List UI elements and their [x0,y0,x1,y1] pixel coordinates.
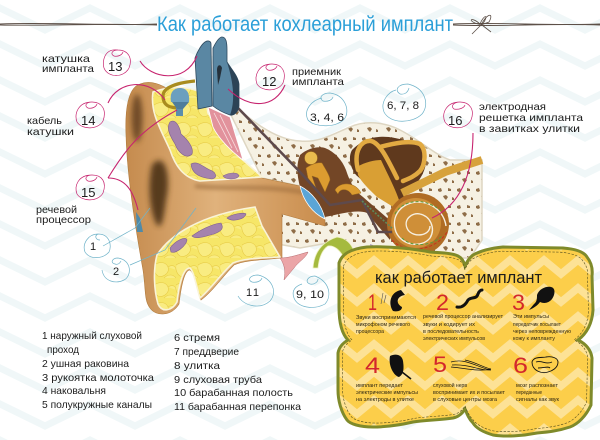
step 2: речевой процессор анализирует [423,313,504,320]
coil cable [163,81,195,108]
step 6 [513,353,560,403]
legend column 2: 11 барабанная перепонка [174,401,301,413]
cochlea [387,193,449,255]
step 5: воспринимает их и посылает [433,390,506,396]
step 3: через неповрежденную [513,329,571,335]
legend column 1: проход [47,344,79,356]
step 5 [433,352,506,403]
legend column 1: 2 ушная раковина [42,358,129,370]
ossicles [304,152,361,195]
step 4: на электроды в улитке [356,397,414,403]
legend column 2: 8 улитка [174,360,220,372]
label: речевой процессор: процессор [36,214,91,226]
legend column 2: 10 барабанная полость [174,387,294,399]
inner ear cavity [350,137,426,212]
step 2: звуки и кодирует их [423,322,475,328]
blue callout lines [103,208,196,265]
legend column 1: 4 наковальня [42,385,106,397]
callout 15: 15 [81,185,95,200]
legend column 2: 9 слуховая труба [174,374,262,386]
step 2: электрических импульсов [423,336,485,342]
label: электродная решетка: электродная [479,101,546,113]
step 6: 6 [513,353,528,378]
ear drum blue [300,186,325,219]
callout 3, 4, 6: 3, 4, 6 [310,112,344,124]
implant receiver [213,37,239,115]
purple nerve patch [370,244,384,258]
panel background [338,247,593,436]
outer ear [126,82,325,314]
callout 15 [76,175,104,200]
ear cross-section illustration [126,82,482,314]
muscle [208,107,243,160]
callout 12: 12 [262,74,276,89]
callout 12 [256,64,284,90]
step 4: электрические импульсы [356,390,418,396]
step 3: передатчик посылает [513,322,562,328]
label: приемник импланта: импланта [292,76,344,88]
legend column 2: 6 стремя [174,332,220,344]
label: кабель катушки: кабель [27,115,63,127]
eustachian tube [313,237,354,268]
step 2 [423,290,504,342]
label: катушка импланта: импланта [42,63,94,75]
step 1: Звуки воспринимаются [356,315,416,321]
eardrum flap [280,252,308,280]
step 4 [356,353,418,403]
upper yellow tissue [152,87,262,181]
auditory nerve [402,160,482,193]
step 1: 1 [368,290,377,315]
step 3 [512,287,571,342]
callout 1: 1 [90,241,96,253]
label: приемник импланта: приемник [292,66,341,78]
step 3: 3 [512,290,525,315]
step 3: кожу к импланту [513,336,555,342]
callout 2: 2 [113,266,119,278]
step 1 [356,290,416,335]
step 6: переданные [516,390,542,396]
step 2: в последовательность [423,329,479,335]
label: речевой процессор: речевой [36,204,77,216]
callout 13 [103,50,130,76]
panel: how the implant works [338,247,593,436]
step 2: 2 [436,290,449,315]
callout 13: 13 [108,59,122,74]
callout 9, 10 [293,276,329,307]
electrode array wire [238,108,392,232]
step 1: микрофоном речевого [356,322,410,328]
step 6: сигналы как звук [516,397,560,403]
step 5: 5 [433,352,447,377]
semicircular canals [357,141,425,210]
callout 14 [76,102,104,128]
legend column 1: 1 наружный слуховой [42,330,142,342]
purple glands [168,121,246,252]
canal upper shadow [195,186,312,194]
callout 2 [102,258,129,282]
lower yellow tissue [154,207,280,310]
legend column 1: 3 рукоятка молоточка [42,372,154,384]
callout 1 [84,234,110,258]
title [0,13,600,36]
title: Как работает кохлеарный имплант [157,13,453,36]
callout 9, 10: 9, 10 [296,289,324,301]
speech processor behind ear [136,212,143,232]
step 3: Эти импульсы [513,314,549,320]
label: электродная решетка: в завитках улитки [479,123,580,135]
pink callout lines [108,56,473,218]
label: электродная решетка: решетка импланта [479,112,583,124]
middle ear cavity [297,147,393,240]
callout 16 [444,102,472,128]
step 5: слуховой нерв [433,382,467,389]
callout 14: 14 [81,113,95,128]
legend column 2: 7 преддверие [174,346,239,358]
step 4: имплант передает [356,383,404,389]
label: катушка импланта: катушка [42,53,90,65]
step 6: мозг распознает [516,383,559,389]
callout 11: 11 [246,287,259,299]
callout 6, 7, 8: 6, 7, 8 [387,100,419,112]
panel heading: как работает имплант [375,268,542,287]
callout 16: 16 [448,113,462,128]
step 1: процессора [356,329,384,335]
step 5: в слуховые центры мозга [433,397,497,403]
temporal bone [230,110,482,258]
implant coil [195,41,212,109]
callout 6, 7, 8 [383,84,426,121]
legend column 1: 5 полукружные каналы [42,399,152,411]
callout 11 [238,275,274,306]
dashed stitch border [342,251,589,432]
callout 3, 4, 6 [307,93,347,126]
label: кабель катушки: катушки [27,126,74,138]
ear shading [132,94,142,142]
magnet [171,88,189,116]
step 4: 4 [365,353,380,378]
